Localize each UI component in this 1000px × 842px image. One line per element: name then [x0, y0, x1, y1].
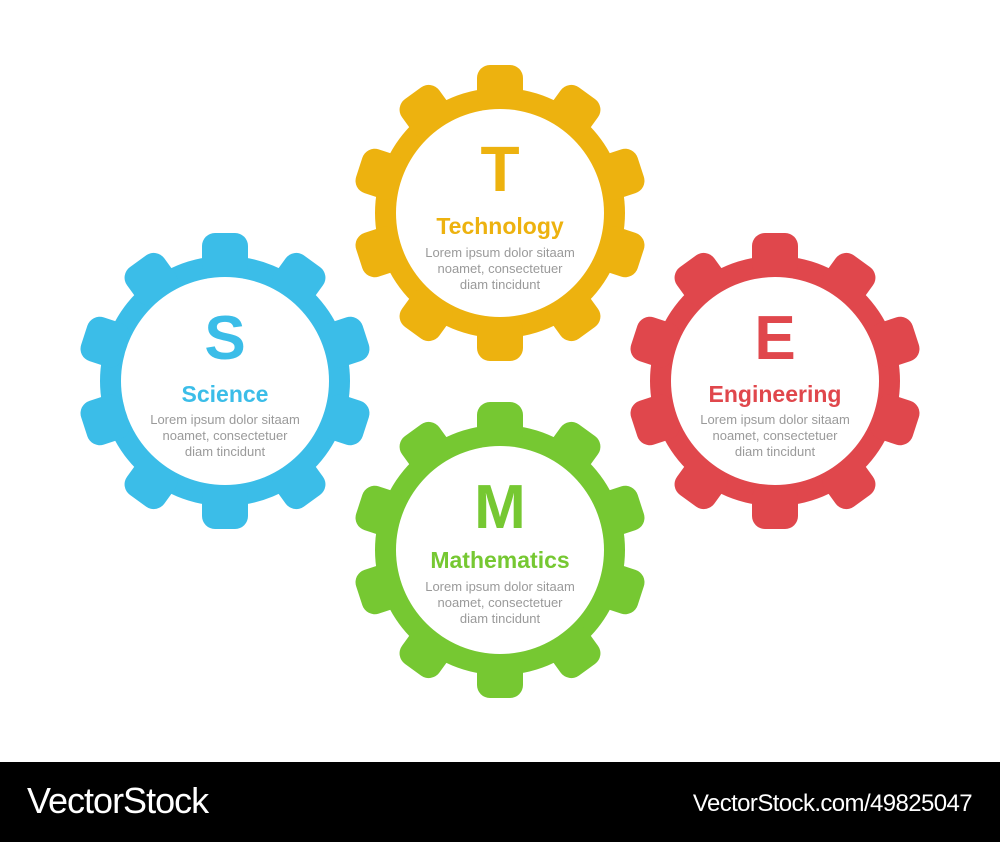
text: Science description: Lorem ipsum dolor sitaam: [150, 412, 300, 427]
text: Technology description: Lorem ipsum dolor sitaam: [425, 245, 575, 260]
heading: Science: Science: [182, 381, 268, 407]
letter E: E: [754, 304, 796, 373]
footer url text: VectorStock.com/49825047: [693, 790, 972, 817]
text: Engineering description: diam tincidunt: [735, 444, 815, 459]
gear: Science: [77, 233, 373, 529]
text: Mathematics description: noamet, consectetuer: [437, 595, 563, 610]
text: Mathematics description: Lorem ipsum dolor sitaam: [425, 579, 575, 594]
text: Science description: noamet, consectetuer: [162, 428, 288, 443]
text: Engineering description: noamet, consectetuer: [712, 428, 838, 443]
letter T: T: [480, 133, 520, 205]
letter S: S: [204, 304, 246, 373]
text: Mathematics description: diam tincidunt: [460, 611, 540, 626]
gear: Mathematics: [352, 402, 648, 698]
heading: Engineering: Engineering: [709, 381, 841, 407]
footer bar: [0, 762, 1000, 842]
text: Engineering description: Lorem ipsum dolor sitaam: [700, 412, 850, 427]
heading: Technology: Technology: [436, 213, 564, 239]
gear: Technology: [352, 65, 648, 361]
footer logo text: VectorStock: [27, 780, 208, 821]
text: Science description: diam tincidunt: [185, 444, 265, 459]
text: Technology description: diam tincidunt: [460, 277, 540, 292]
letter M: M: [474, 473, 526, 542]
text: Technology description: noamet, consectetuer: [437, 261, 563, 276]
heading: Mathematics: Mathematics: [430, 547, 570, 573]
gear: Engineering: [627, 233, 923, 529]
